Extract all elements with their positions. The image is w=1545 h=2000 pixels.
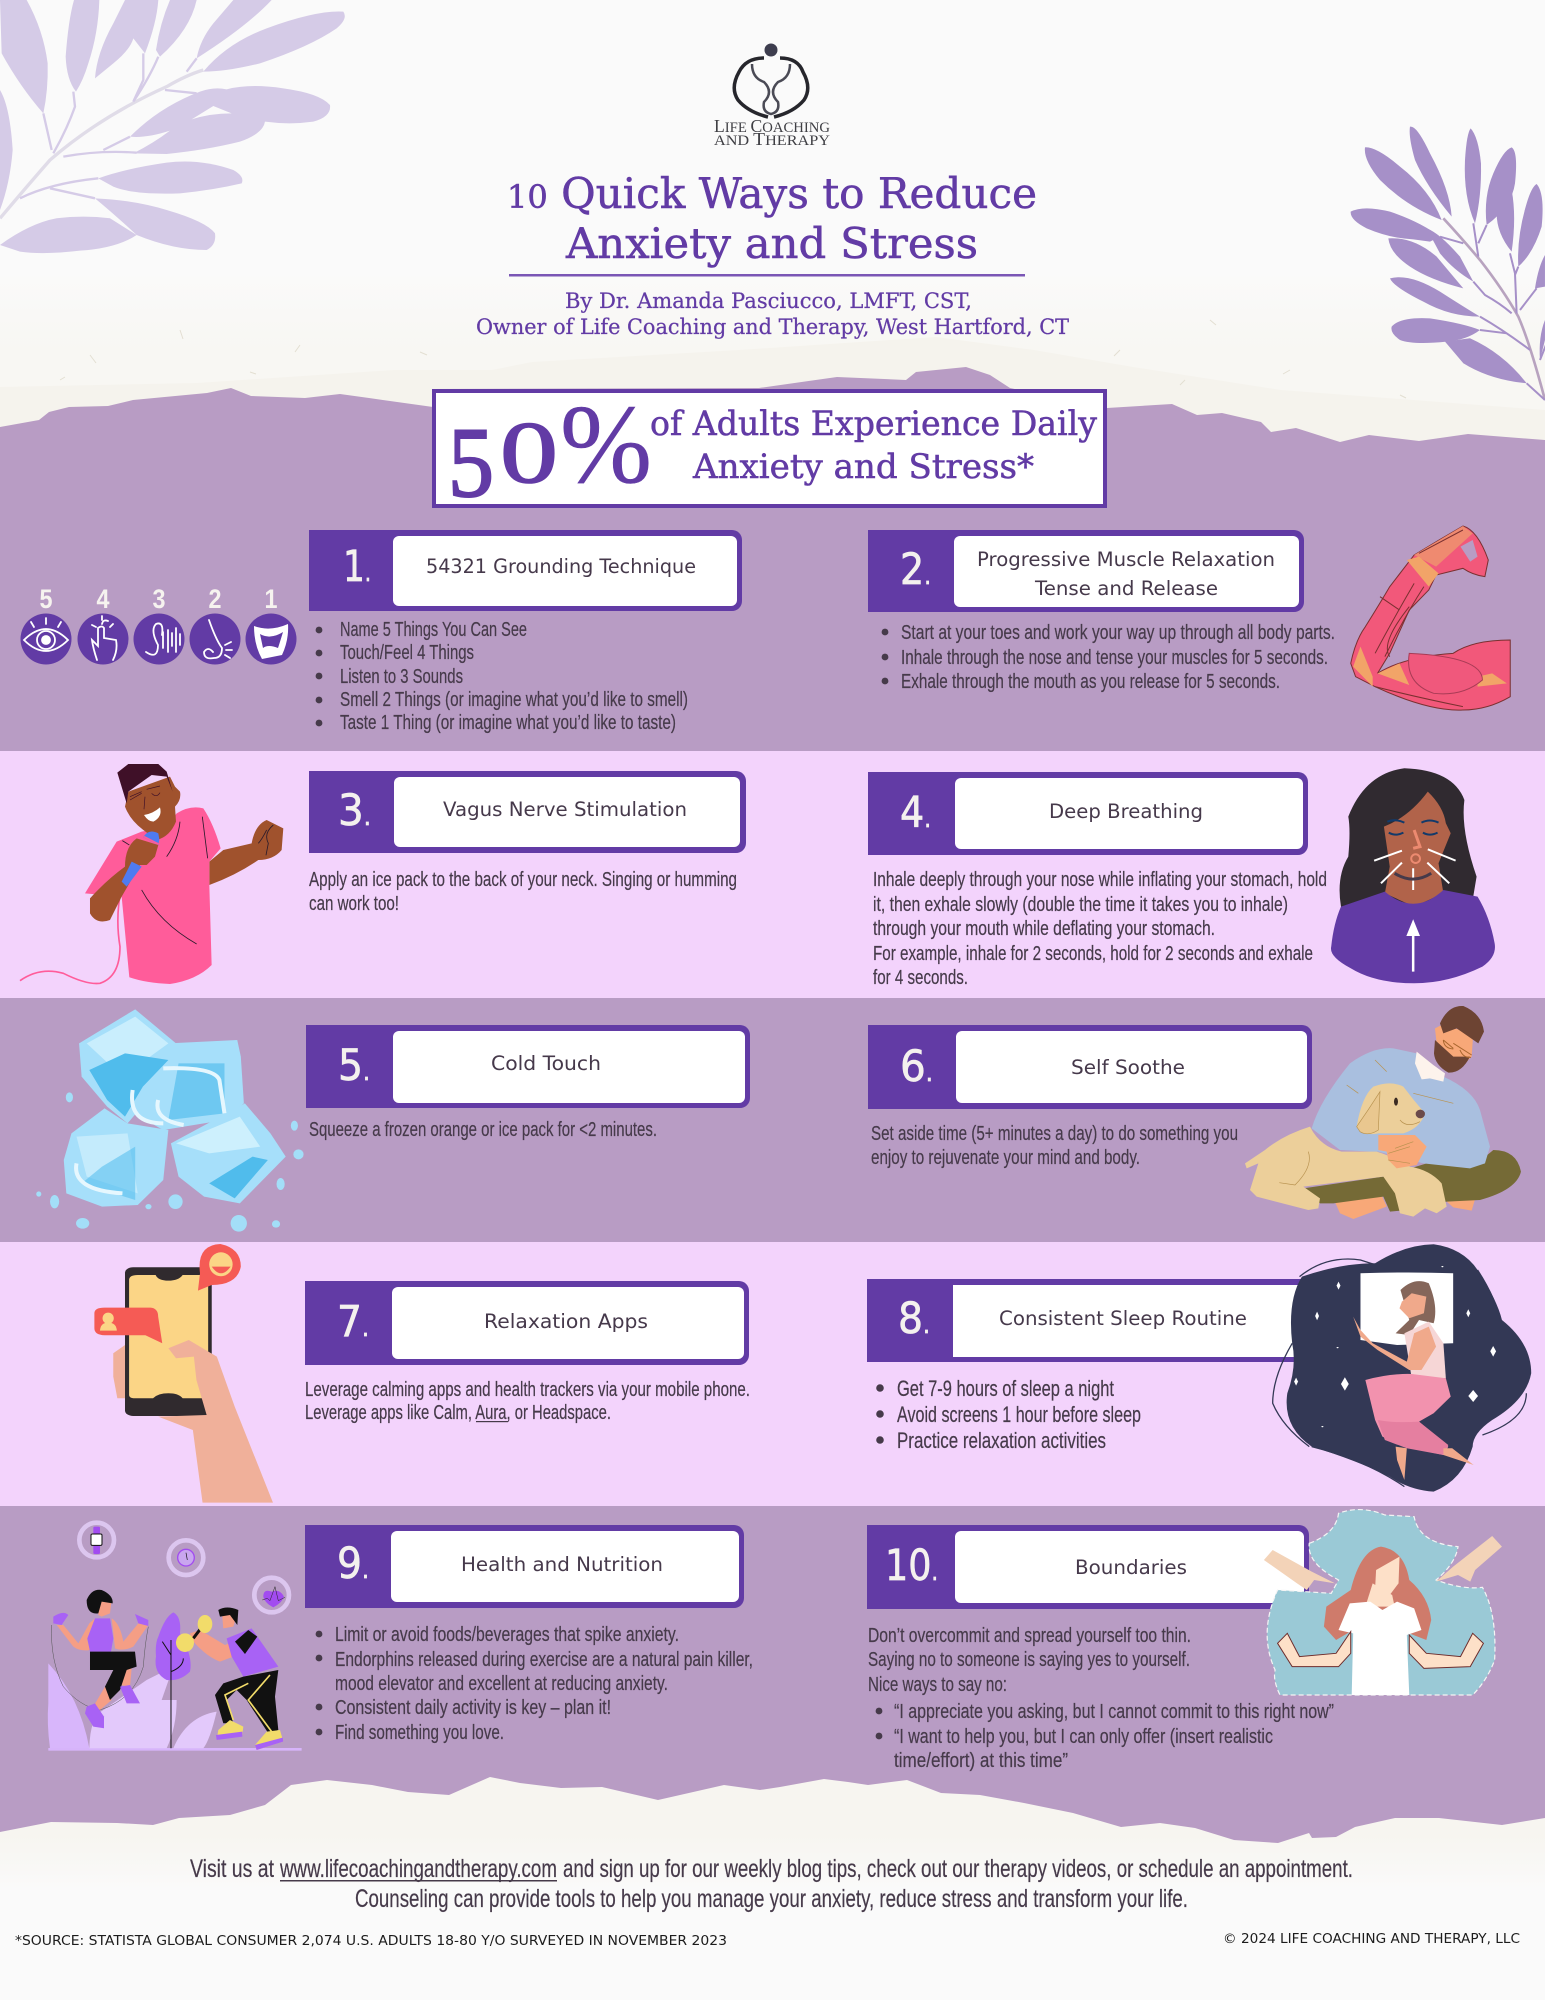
text: boundaries description: Saying no to someone is saying yes to yourself. bbox=[868, 1649, 1190, 1671]
text: relaxation apps description: Leverage calming apps and health trackers via your mobile phone. bbox=[305, 1379, 750, 1401]
text: health steps: Consistent daily activity is key – plan it! bbox=[335, 1697, 611, 1719]
heading: Vagus Nerve Stimulation: Vagus Nerve Stimulation bbox=[443, 798, 687, 821]
copyright: © 2024 LIFE COACHING AND THERAPY, LLC bbox=[1223, 1931, 1520, 1947]
text: vagus description: can work too! bbox=[309, 893, 399, 915]
panel: 6 self soothe bbox=[868, 1006, 1521, 1219]
heading: Vagus Nerve Stimulation bbox=[309, 771, 746, 853]
heading: Self Soothe bbox=[868, 1025, 1312, 1109]
heading: Relaxation Apps bbox=[305, 1281, 749, 1365]
callout: 50% statistic: 5 bbox=[448, 407, 494, 518]
panel: 10 boundaries bbox=[867, 1510, 1502, 1772]
panel: 2 progressive muscle relaxation bbox=[868, 526, 1510, 710]
heading: Cold Touch bbox=[306, 1025, 750, 1108]
footer call to action: www.lifecoachingandtherapy.com bbox=[279, 1855, 557, 1883]
text: cold touch description: Squeeze a frozen orange or ice pack for <2 minutes. bbox=[309, 1119, 657, 1141]
purple paper background bbox=[0, 367, 1545, 1843]
text: grounding steps bbox=[316, 619, 688, 734]
logo: Life Coaching and Therapy: LIFE COACHING bbox=[714, 116, 830, 136]
text: relaxation steps: Exhale through the mouth as you release for 5 seconds. bbox=[901, 671, 1280, 693]
text: boundaries description: time/effort) at this time” bbox=[894, 1750, 1068, 1772]
panel: 9 health and nutrition bbox=[48, 1523, 753, 1751]
text: sleep steps: Avoid screens 1 hour before sleep bbox=[897, 1402, 1141, 1427]
heading: Boundaries bbox=[867, 1525, 1309, 1609]
text: breathing description: for 4 seconds. bbox=[873, 967, 968, 989]
text: grounding steps: Name 5 Things You Can See bbox=[340, 619, 527, 641]
heading: Progressive Muscle Relaxation bbox=[868, 530, 1304, 612]
text: boundaries description: “I want to help you, but I can only offer (insert realistic bbox=[894, 1726, 1273, 1748]
panel: 7 relaxation apps bbox=[94, 1244, 750, 1503]
text: relaxation steps: Inhale through the nose and tense your muscles for 5 seconds. bbox=[901, 647, 1328, 669]
illustration: hand holding phone bbox=[94, 1244, 273, 1503]
footer call to action: Counseling can provide tools to help you manage your anxiety, reduce stress and transform your life. bbox=[355, 1885, 1188, 1913]
decoration: top-left leaves bbox=[0, 0, 345, 253]
heading: Relaxation Apps: 7. bbox=[337, 1297, 369, 1347]
callout: 50% statistic: % bbox=[560, 383, 652, 507]
text: self soothe description: enjoy to rejuvenate your mind and body. bbox=[871, 1147, 1140, 1169]
heading: Cold Touch: Cold Touch bbox=[491, 1052, 601, 1075]
text: vagus description bbox=[309, 869, 737, 915]
heading: Relaxation Apps: Relaxation Apps bbox=[484, 1310, 648, 1333]
text: sleep steps bbox=[876, 1376, 1141, 1453]
text: boundaries description: Nice ways to say no: bbox=[868, 1674, 1007, 1696]
panel: 5 cold touch bbox=[36, 1009, 750, 1232]
text: self soothe description bbox=[871, 1123, 1238, 1169]
heading: Deep Breathing: Deep Breathing bbox=[1049, 800, 1203, 823]
logo: Life Coaching and Therapy: AND THERAPY bbox=[714, 129, 830, 149]
text: self soothe description: Set aside time (5+ minutes a day) to do something you bbox=[871, 1123, 1238, 1145]
text: relaxation apps description bbox=[305, 1379, 750, 1424]
byline bbox=[476, 289, 1069, 339]
callout: 50% statistic: of Adults Experience Daily bbox=[650, 404, 1098, 444]
illustration: ice cubes bbox=[36, 1009, 304, 1232]
byline: By Dr. Amanda Pasciucco, LMFT, CST, bbox=[565, 289, 972, 313]
icons: five senses: 4 bbox=[96, 584, 110, 614]
text: health steps: Find something you love. bbox=[335, 1722, 504, 1744]
text: health steps: Limit or avoid foods/beverages that spike anxiety. bbox=[335, 1624, 679, 1646]
panel: 3 vagus nerve stimulation bbox=[20, 764, 746, 984]
heading: Progressive Muscle Relaxation: Tense and Release bbox=[1034, 577, 1218, 600]
text: breathing description: Inhale deeply through your nose while inflating your stomach, hold bbox=[873, 869, 1327, 891]
title: 10 Quick Ways to Reduce bbox=[507, 169, 1037, 218]
decoration: top-right leaves bbox=[1351, 127, 1545, 400]
text: breathing description bbox=[873, 869, 1327, 989]
illustration: man singing into microphone bbox=[20, 764, 283, 984]
heading: Boundaries: 10. bbox=[885, 1541, 938, 1591]
heading: Progressive Muscle Relaxation: 2. bbox=[900, 545, 931, 595]
text: sleep steps: Get 7-9 hours of sleep a night bbox=[897, 1376, 1114, 1401]
panel: 8 consistent sleep routine bbox=[867, 1244, 1531, 1492]
heading: Boundaries: Boundaries bbox=[1075, 1556, 1187, 1579]
text: grounding steps: Taste 1 Thing (or imagine what you’d like to taste) bbox=[340, 712, 676, 734]
callout: 50% statistic: Anxiety and Stress* bbox=[692, 447, 1034, 487]
heading: Consistent Sleep Routine: Consistent Sleep Routine bbox=[999, 1307, 1247, 1330]
text: health steps: Endorphins released during exercise are a natural pain killer, bbox=[335, 1649, 753, 1671]
illustration: flexed arm muscles bbox=[1351, 526, 1510, 710]
panel: 1 grounding technique bbox=[20, 530, 742, 734]
text: vagus description: Apply an ice pack to the back of your neck. Singing or humming bbox=[309, 869, 737, 891]
heading: Progressive Muscle Relaxation: Progressive Muscle Relaxation bbox=[977, 548, 1275, 571]
heading: Health and Nutrition: Health and Nutrition bbox=[461, 1553, 663, 1576]
pink band: rows 7 and 8 bbox=[0, 1242, 1545, 1506]
heading: Self Soothe: 6. bbox=[900, 1042, 933, 1092]
text: boundaries description bbox=[868, 1625, 1334, 1772]
logo: Life Coaching and Therapy bbox=[714, 44, 830, 149]
pink band: rows 3 and 4 bbox=[0, 751, 1545, 998]
text: sleep steps: Practice relaxation activities bbox=[897, 1428, 1106, 1453]
callout: 50% statistic bbox=[434, 383, 1105, 518]
text: relaxation steps: Start at your toes and work your way up through all body parts. bbox=[901, 622, 1335, 644]
title: Anxiety and Stress bbox=[565, 219, 978, 268]
text: relaxation steps bbox=[882, 622, 1335, 693]
text: relaxation apps description: Leverage apps like Calm, Aura, or Headspace. bbox=[305, 1402, 611, 1424]
text: grounding steps: Listen to 3 Sounds bbox=[340, 666, 463, 688]
heading: Health and Nutrition: 9. bbox=[337, 1539, 369, 1589]
heading: Deep Breathing bbox=[868, 772, 1308, 855]
heading: Health and Nutrition bbox=[305, 1525, 744, 1608]
byline: Owner of Life Coaching and Therapy, West Hartford, CT bbox=[476, 315, 1069, 339]
text: boundaries description: “I appreciate you asking, but I cannot commit to this right now” bbox=[894, 1701, 1334, 1723]
source note: *SOURCE: STATISTA GLOBAL CONSUMER 2,074 U.S. ADULTS 18-80 Y/O SURVEYED IN NOVEMBER 2023 bbox=[15, 1933, 727, 1949]
text: grounding steps: Touch/Feel 4 Things bbox=[340, 642, 474, 664]
icons: five senses: 3 bbox=[152, 584, 166, 614]
illustration: people exercising bbox=[48, 1523, 302, 1751]
text: breathing description: For example, inhale for 2 seconds, hold for 2 seconds and exhale bbox=[873, 943, 1313, 965]
icons: five senses: 1 bbox=[264, 584, 278, 614]
illustration: woman sleeping on night sky bbox=[1273, 1244, 1531, 1492]
text: health steps: mood elevator and excellent at reducing anxiety. bbox=[335, 1673, 668, 1695]
heading: Consistent Sleep Routine: 8. bbox=[898, 1294, 930, 1344]
illustration: man hugging dog bbox=[1245, 1006, 1521, 1219]
panel: 4 deep breathing bbox=[868, 768, 1495, 989]
icons: five senses: 2 bbox=[208, 584, 222, 614]
heading: Cold Touch: 5. bbox=[338, 1041, 370, 1091]
heading: 54321 Grounding Technique: 54321 Grounding Technique bbox=[426, 555, 696, 578]
text: breathing description: through your mouth while deflating your stomach. bbox=[873, 918, 1215, 940]
footer call to action: Visit us at bbox=[190, 1855, 274, 1883]
icons: five senses bbox=[20, 584, 296, 664]
icons: five senses: 5 bbox=[40, 584, 52, 614]
text: grounding steps: Smell 2 Things (or imagine what you’d like to smell) bbox=[340, 689, 688, 711]
text: breathing description: it, then exhale slowly (double the time it takes you to inhale) bbox=[873, 894, 1288, 916]
callout: 50% statistic: 0 bbox=[500, 405, 558, 502]
title bbox=[507, 169, 1037, 276]
heading: Vagus Nerve Stimulation: 3. bbox=[338, 786, 371, 836]
heading: 54321 Grounding Technique bbox=[309, 530, 742, 611]
heading: 54321 Grounding Technique: 1. bbox=[343, 542, 371, 592]
heading: Deep Breathing: 4. bbox=[900, 788, 931, 838]
text: health steps bbox=[316, 1624, 753, 1744]
heading: Consistent Sleep Routine bbox=[867, 1279, 1330, 1362]
illustration: woman breathing deeply bbox=[1331, 768, 1495, 983]
illustration: woman setting boundaries bbox=[1264, 1510, 1502, 1695]
text: boundaries description: Don’t overcommit and spread yourself too thin. bbox=[868, 1625, 1191, 1647]
footer call to action bbox=[190, 1855, 1353, 1913]
heading: Self Soothe: Self Soothe bbox=[1071, 1056, 1185, 1079]
